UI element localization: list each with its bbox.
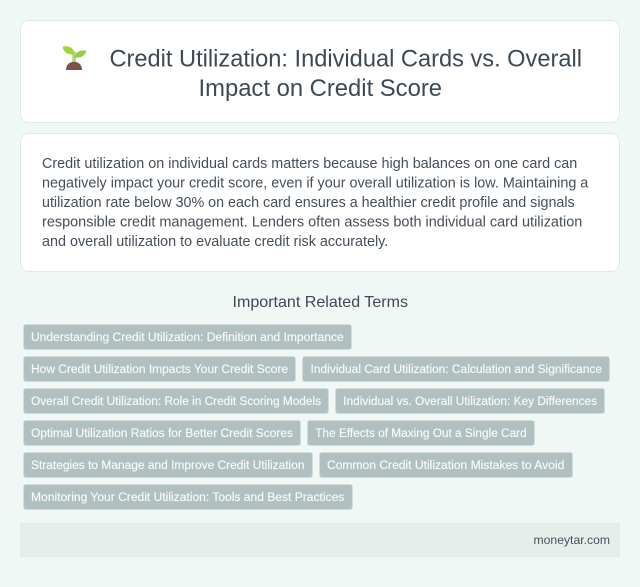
- tag: strategies: [24, 452, 312, 478]
- tag: understanding credit utilization: Understanding Credit Utilization: Definition and Importance: [31, 330, 344, 344]
- icon: sprout: [62, 46, 86, 70]
- tag: overall credit utilization: Overall Credit Utilization: Role in Credit Scoring Models: [31, 394, 321, 408]
- tag: monitoring: Monitoring Your Credit Utilization: Tools and Best Practices: [31, 490, 344, 504]
- tag: individual vs overall: [336, 388, 604, 414]
- tag: how credit utilization impacts score: [24, 356, 296, 382]
- title: Impact on Credit Score: [198, 75, 442, 102]
- tag: overall credit utilization: [24, 388, 328, 414]
- footer: [20, 523, 620, 557]
- text block: description paragraph: and overall utilization to evaluate credit risk accurately.: [42, 234, 388, 250]
- title: Credit Utilization: Individual Cards vs. Overall: [110, 46, 582, 72]
- tag: effects of maxing out: The Effects of Maxing Out a Single Card: [315, 426, 527, 440]
- tag: effects of maxing out: [308, 420, 534, 446]
- tag: monitoring: [24, 484, 352, 510]
- tag list: related terms: [24, 324, 610, 510]
- tag: understanding credit utilization: [24, 324, 352, 350]
- tag: common mistakes: Common Credit Utilization Mistakes to Avoid: [327, 458, 564, 472]
- footer source text: moneytar.com: [534, 533, 610, 547]
- tag: optimal utilization ratios: Optimal Utilization Ratios for Better Credit Scores: [31, 426, 293, 440]
- tag: individual vs overall: Individual vs. Overall Utilization: Key Differences: [343, 394, 597, 408]
- panel: title header: [20, 20, 620, 122]
- text block: description paragraph: utilization rate below 30% on each card ensures a healthier credit profile and signals: [42, 195, 575, 211]
- tag: individual card utilization: [302, 356, 610, 382]
- title: [110, 46, 582, 102]
- tag: individual card utilization: Individual Card Utilization: Calculation and Significance: [310, 362, 602, 376]
- tag: common mistakes: [320, 452, 572, 478]
- text block: description paragraph: negatively impact your credit score, even if your overall utilization is low. Maintaining a: [42, 176, 588, 192]
- text block: description paragraph: Credit utilization on individual cards matters because high balances on one card can: [42, 156, 577, 172]
- panel: description: [20, 134, 620, 272]
- text block: description paragraph: responsible credit management. Lenders often assess both individual card utilization: [42, 214, 582, 230]
- tag: strategies: Strategies to Manage and Improve Credit Utilization: [31, 458, 305, 472]
- tag: how credit utilization impacts score: How Credit Utilization Impacts Your Credit Score: [31, 362, 288, 376]
- heading: important related terms: Important Related Terms: [232, 294, 408, 311]
- tag: optimal utilization ratios: [24, 420, 300, 446]
- text block: description paragraph: [42, 156, 588, 250]
